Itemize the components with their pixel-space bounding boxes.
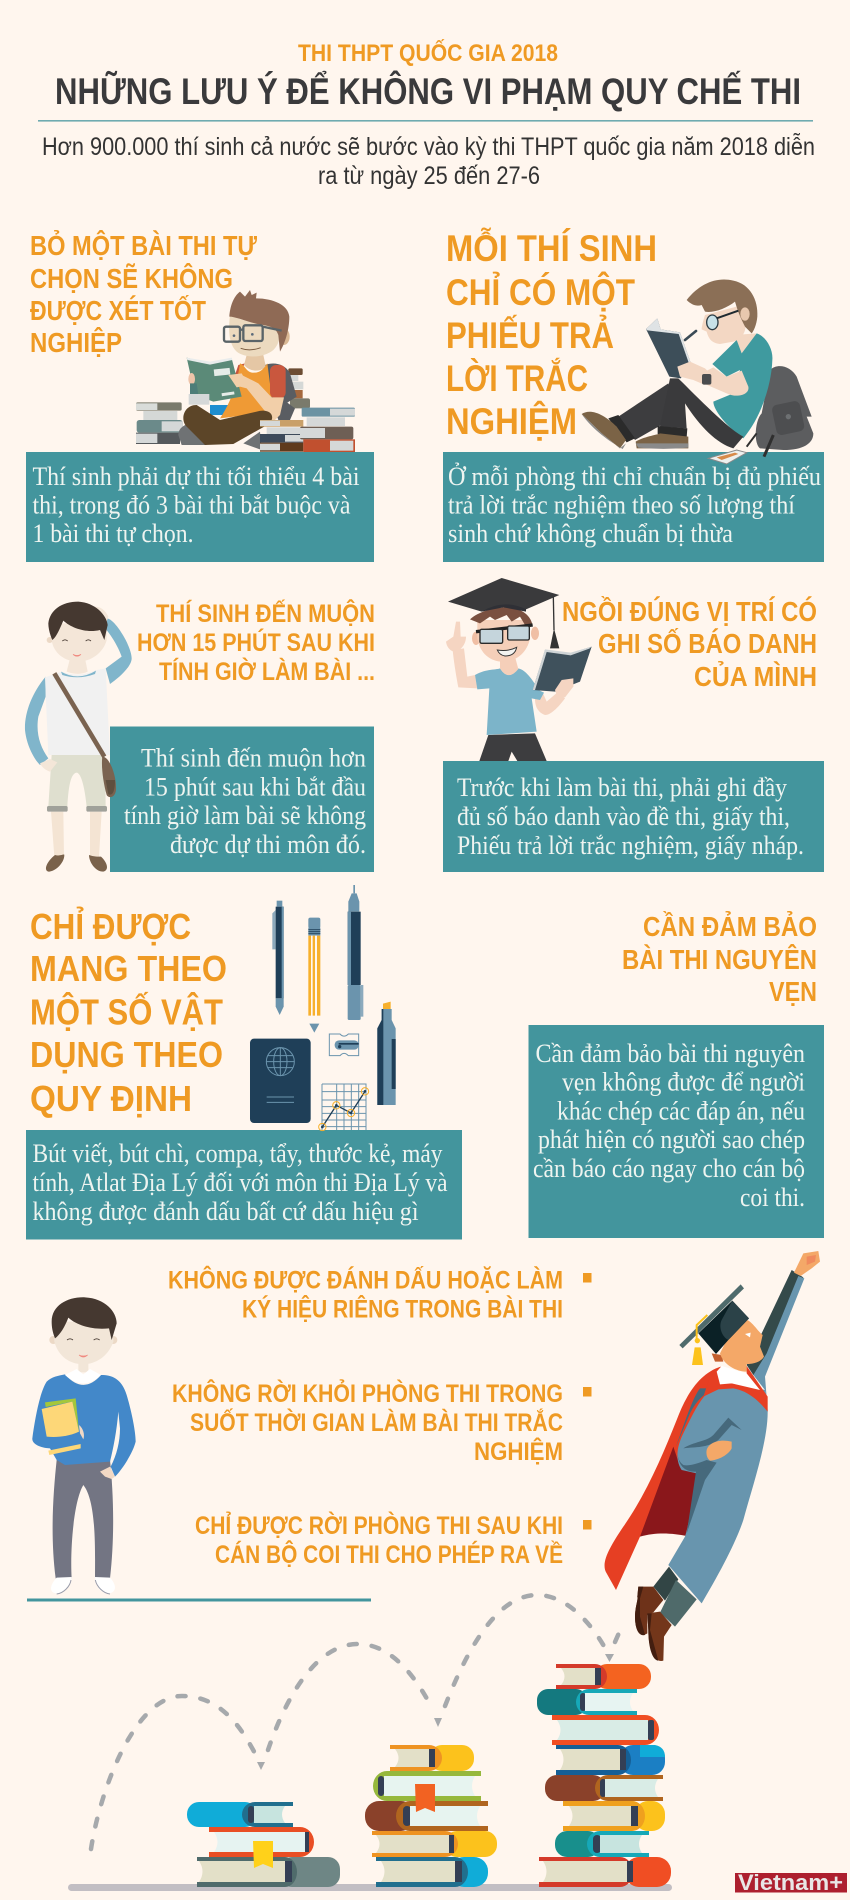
- arrow: dashed bouncing path: [91, 1595, 622, 1849]
- book: blue: [376, 1857, 488, 1887]
- icon: pencil: [308, 918, 320, 1033]
- heading: arriving late: [137, 598, 375, 686]
- heading: permitted items: MỘT SỐ VẬT: [30, 990, 223, 1032]
- panel: keep exam intact text: coi thi.: [740, 1183, 805, 1212]
- panel: write candidate number: [443, 761, 824, 872]
- intro text: ra từ ngày 25 đến 27-6: [318, 162, 540, 190]
- heading: keep exam intact: VẸN: [769, 976, 817, 1007]
- panel: keep exam intact text: Cần đảm bảo bài thi nguyên: [536, 1039, 805, 1068]
- panel: write candidate number: Phiếu trả lời trắc nghiệm, giấy nháp.: [457, 831, 804, 860]
- panel: answer sheets per room: sinh chứ không chuẩn bị thừa: [448, 519, 733, 548]
- heading: permitted items: MANG THEO: [30, 948, 227, 989]
- heading: correct seat: CỦA MÌNH: [694, 660, 817, 692]
- kicker heading: THI THPT QUỐC GIA 2018: [298, 39, 558, 67]
- panel: answer sheets per room: trả lời trắc nghiệm theo số lượng thí: [448, 490, 795, 520]
- heading: permitted items: [30, 906, 227, 1119]
- heading: one answer sheet: LỜI TRẮC: [446, 357, 588, 399]
- illustration: flying graduate: [605, 1251, 820, 1661]
- panel: answer sheets per room: [443, 452, 824, 562]
- heading: permitted items: DỤNG THEO: [30, 1034, 223, 1075]
- book: yellow top: [390, 1745, 474, 1771]
- icon: pen: [272, 901, 284, 1015]
- heading: skip elective: CHỌN SẼ KHÔNG: [30, 262, 233, 294]
- rule two: NGHIỆM: [474, 1436, 563, 1466]
- book: blue: [556, 1745, 665, 1775]
- chart: rising line: [319, 1084, 369, 1131]
- illustration: student in graduation cap: [446, 578, 592, 761]
- panel: minimum four subjects: Thí sinh phải dự thi tối thiểu 4 bài: [32, 462, 360, 491]
- panel: write candidate number: đủ số báo danh vào đề thi, giấy thi,: [457, 802, 790, 831]
- book: yellow: [372, 1831, 497, 1857]
- panel: minimum four subjects: 1 bài thi tự chọn.: [32, 519, 194, 548]
- heading: one answer sheet: PHIẾU TRẢ: [446, 315, 614, 356]
- book: teal dark: [537, 1689, 637, 1715]
- panel: minimum four subjects: [26, 452, 374, 562]
- heading: keep exam intact: [622, 910, 817, 1007]
- panel: keep exam intact text: cần báo cáo ngay cho cán bộ: [533, 1154, 805, 1183]
- panel: minimum four subjects: thi, trong đó 3 bài thi bắt buộc và: [32, 490, 351, 520]
- bookshelf ground line: [68, 1884, 672, 1891]
- illustration: middle stack of books: [365, 1745, 497, 1887]
- book: brown: [545, 1775, 663, 1801]
- heading: permitted items: CHỈ ĐƯỢC: [30, 906, 191, 947]
- book: brown: [365, 1801, 488, 1831]
- icon: highlighter: [377, 1002, 396, 1105]
- bookmark: orange: [415, 1784, 435, 1812]
- rule three: [195, 1510, 592, 1569]
- illustration: tall stack of books: [537, 1664, 671, 1887]
- heading: one answer sheet: [446, 227, 657, 442]
- heading: arriving late: THÍ SINH ĐẾN MUỘN: [156, 598, 375, 628]
- heading: correct seat: [562, 596, 817, 692]
- panel: late rule: tính giờ làm bài sẽ không: [124, 801, 366, 830]
- heading: skip elective: [30, 229, 258, 358]
- icon: marker pen: [348, 885, 363, 1020]
- logo: Vietnam+ watermark: Vietnam+: [738, 1870, 843, 1895]
- rule two: [172, 1378, 592, 1466]
- heading: skip elective: ĐƯỢC XÉT TỐT: [30, 294, 206, 326]
- bookmark: yellow: [253, 1841, 273, 1868]
- panel: write candidate number: Trước khi làm bài thi, phải ghi đầy: [457, 773, 787, 802]
- heading: keep exam intact: BÀI THI NGUYÊN: [622, 944, 817, 975]
- rule one: [168, 1264, 592, 1323]
- book: red-orange: [539, 1857, 671, 1887]
- heading: keep exam intact: CẦN ĐẢM BẢO: [643, 910, 817, 942]
- panel: keep exam intact text: phát hiện có người sao chép: [538, 1125, 805, 1154]
- panel: keep exam intact text: khác chép các đáp án, nếu: [557, 1096, 805, 1126]
- heading: one answer sheet: MỖI THÍ SINH: [446, 227, 657, 269]
- icon: sharpener: [329, 1034, 359, 1056]
- illustration: student writing with backpack: [582, 280, 813, 464]
- rule three: CÁN BỘ COI THI CHO PHÉP RA VỀ: [215, 1539, 563, 1569]
- heading: one answer sheet: CHỈ CÓ MỘT: [446, 271, 635, 313]
- rule two: KHÔNG RỜI KHỎI PHÒNG THI TRONG: [172, 1378, 563, 1408]
- icon: passport: [250, 1039, 311, 1123]
- rule one: KÝ HIỆU RIÊNG TRONG BÀI THI: [242, 1293, 563, 1323]
- intro text: [42, 132, 815, 190]
- book: green: [373, 1771, 481, 1801]
- heading: skip elective: BỎ MỘT BÀI THI TỰ: [30, 229, 258, 261]
- panel: permitted items list: tính, Atlat Địa Lý đối với môn thi Địa Lý và: [32, 1168, 448, 1197]
- rule one: KHÔNG ĐƯỢC ĐÁNH DẤU HOẶC LÀM: [168, 1264, 563, 1294]
- heading: one answer sheet: NGHIỆM: [446, 400, 577, 442]
- book: red: [209, 1827, 314, 1857]
- panel: late rule: Thí sinh đến muộn hơn: [141, 744, 366, 772]
- panel: answer sheets per room: Ở mỗi phòng thi chỉ chuẩn bị đủ phiếu: [448, 462, 821, 491]
- illustration: boy reading on books: [136, 290, 355, 452]
- book: grey: [197, 1857, 340, 1887]
- list: exam-room rules: [168, 1264, 592, 1569]
- book: red frame: [552, 1715, 659, 1745]
- panel: permitted items list: không được đánh dấu bất cứ dấu hiệu gì: [32, 1197, 418, 1226]
- rule two: SUỐT THỜI GIAN LÀM BÀI THI TRẮC: [190, 1407, 563, 1437]
- illustration: pens, pencil, passport, chart: [250, 885, 396, 1131]
- rule three: CHỈ ĐƯỢC RỜI PHÒNG THI SAU KHI: [195, 1510, 563, 1540]
- panel: late rule: [110, 726, 374, 872]
- illustration: small stack of books: [187, 1802, 340, 1887]
- heading: skip elective: NGHIỆP: [30, 327, 122, 358]
- panel: permitted items list: [26, 1130, 462, 1240]
- title block: [38, 39, 815, 190]
- panel: permitted items list: Bút viết, bút chì, compa, tẩy, thước kẻ, máy: [32, 1139, 442, 1168]
- panel: keep exam intact text: [528, 1025, 824, 1238]
- heading: arriving late: HƠN 15 PHÚT SAU KHI: [137, 627, 375, 657]
- illustration: student in blue sweater: [32, 1297, 136, 1594]
- heading: permitted items: QUY ĐỊNH: [30, 1078, 192, 1119]
- panel: keep exam intact text: vẹn không được để người: [562, 1068, 805, 1096]
- book: teal: [555, 1831, 649, 1857]
- illustration: student with satchel: [25, 602, 132, 872]
- book: blue: [187, 1802, 293, 1827]
- panel: late rule: được dự thi môn đó.: [170, 830, 366, 859]
- book: orange top: [556, 1664, 651, 1689]
- heading: correct seat: GHI SỐ BÁO DANH: [598, 627, 817, 659]
- book: yellow: [563, 1801, 665, 1831]
- panel: late rule: 15 phút sau khi bắt đầu: [144, 772, 366, 802]
- heading: arriving late: TÍNH GIỜ LÀM BÀI ...: [159, 656, 375, 686]
